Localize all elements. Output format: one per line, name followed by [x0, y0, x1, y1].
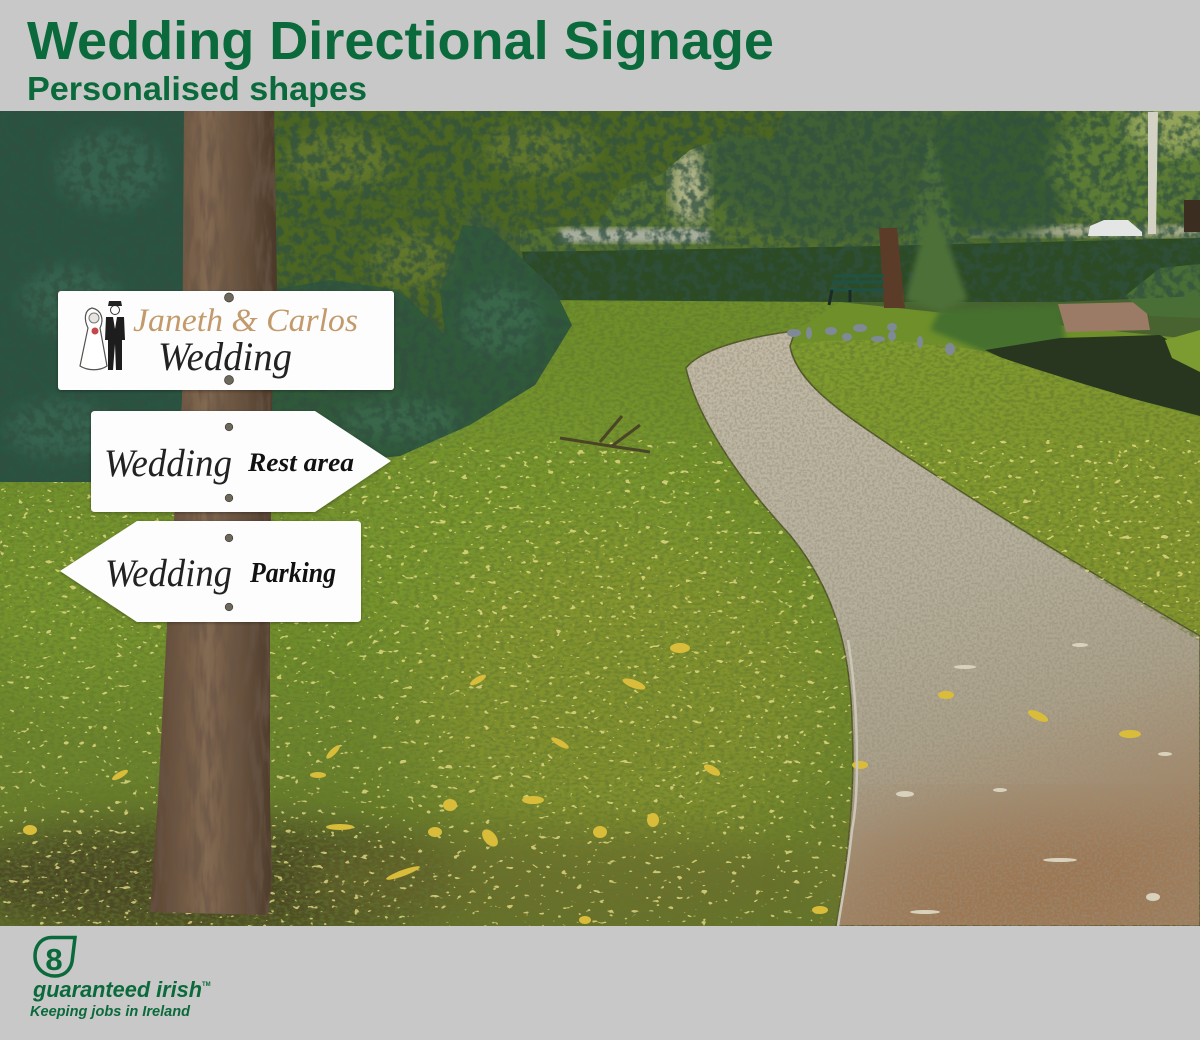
sign screw holes [224, 293, 234, 384]
right lawn [790, 340, 1200, 642]
title: Wedding Directional Signage [27, 11, 774, 71]
scattered yellow leaf speckle [0, 440, 1200, 926]
dark tree trunk at right edge [1184, 200, 1200, 232]
path edging [838, 640, 857, 926]
sign: Janeth & Carlos wedding [58, 291, 394, 390]
sign text: Wedding: Wedding [158, 334, 292, 379]
hedge [522, 238, 1200, 302]
sign: arrow left, Wedding Parking [60, 521, 361, 622]
icon: guaranteed irish emblem [35, 938, 75, 977]
foliage texture on shrubs and trees [0, 111, 1200, 482]
trunk bark texture [150, 111, 277, 915]
right shrub [270, 218, 572, 470]
logo wordmark: guaranteed irish [32, 977, 202, 1002]
sign screw holes [225, 534, 233, 611]
small conifer [905, 200, 968, 312]
main lawn [0, 300, 1200, 926]
sign text: Janeth & Carlos: Janeth & Carlos [133, 303, 358, 339]
ducks [787, 323, 955, 355]
icon: bride and groom [80, 301, 125, 370]
left shrub [0, 111, 190, 482]
sign screw holes [225, 423, 233, 502]
pale leaves on path [896, 643, 1172, 914]
foreground tree trunk [150, 111, 277, 915]
fallen twig [560, 416, 650, 452]
highlights on shrubs [5, 130, 540, 460]
mossy bank and pond [930, 264, 1200, 416]
logo tagline: Keeping jobs in Ireland [30, 1003, 191, 1020]
fallen yellow leaves [23, 643, 1141, 924]
gravel path [686, 331, 1200, 926]
icon: guaranteed irish emblem: 8 [45, 942, 63, 977]
warm path patch [840, 820, 1180, 940]
background tree trunk [879, 228, 905, 308]
overhanging canopy [270, 111, 785, 335]
footer logo: Guaranteed Irish [30, 938, 211, 1020]
parked car [1088, 220, 1142, 236]
sign text: Wedding: Wedding [105, 552, 232, 595]
grass texture [0, 300, 1200, 926]
sign text: Rest area: Rest area [247, 448, 354, 477]
lawn shading [0, 449, 834, 926]
canopy highlights [285, 125, 595, 288]
background sky and distant trees [463, 111, 1200, 338]
bench [829, 276, 884, 305]
big conifer and right-hand trees [695, 111, 1200, 245]
path gravel texture [680, 330, 1200, 926]
trademark: TM [202, 982, 211, 988]
subtitle: Personalised shapes [27, 70, 367, 107]
sign text: Wedding: Wedding [104, 442, 232, 485]
pale birch trunk [1148, 112, 1158, 234]
sign: arrow right, Wedding Rest area [91, 411, 391, 512]
sign text: Parking: Parking [249, 558, 336, 589]
